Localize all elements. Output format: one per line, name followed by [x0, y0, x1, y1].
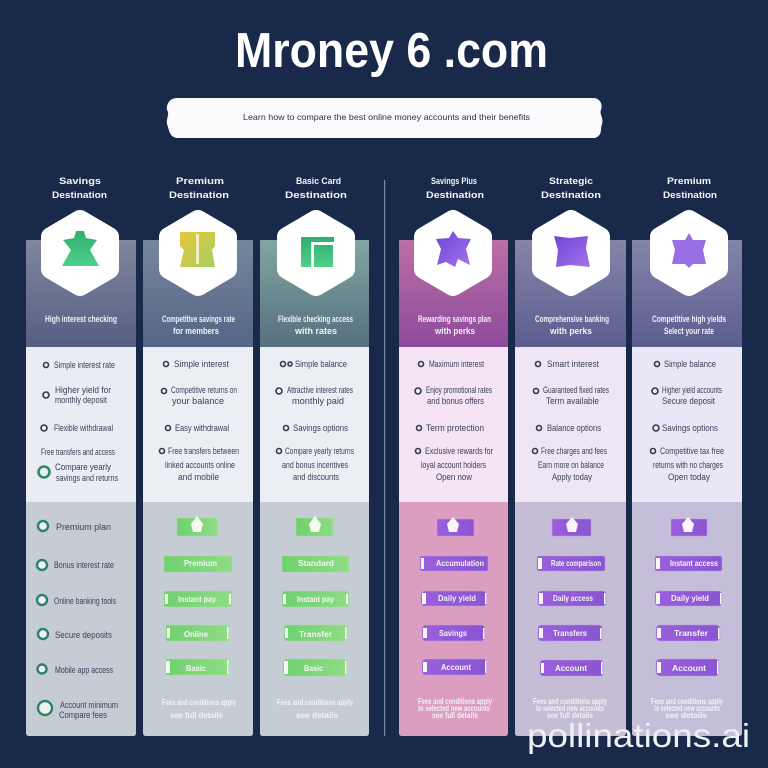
column 6 list: returns with no charges	[653, 460, 723, 470]
column 3 list: and bonus incentives	[282, 460, 348, 470]
column 4 list: Enjoy promotional rates	[426, 385, 492, 395]
column 3 list: monthly paid	[292, 396, 344, 406]
column 2 label: Premium	[176, 176, 224, 187]
column 2 buttons	[164, 516, 232, 675]
column 3 list: and discounts	[293, 472, 339, 482]
column 2 list: linked accounts online	[165, 460, 235, 470]
column 6 header text: Competitive high yields	[652, 314, 726, 325]
column 2 footer note	[162, 697, 236, 720]
column 5 buttons: Rate comparison	[551, 558, 601, 568]
column 3 footer note: Fees and conditions apply	[277, 697, 353, 707]
column 2 lower panel	[143, 502, 253, 736]
column 5 list panel	[515, 347, 626, 502]
column 5 list: Guaranteed fixed rates	[543, 385, 609, 395]
column 1 rows: Secure deposits	[55, 630, 112, 640]
column 5 list: Free charges and fees	[541, 446, 607, 456]
column 3 list: Attractive interest rates	[287, 385, 353, 395]
column 6 footer note: see details	[665, 710, 707, 720]
column 4 footer note: see full details	[432, 710, 478, 720]
column 2 header text: Competitive savings rate	[162, 314, 235, 325]
column 5 buttons: Account	[555, 663, 587, 673]
column 3 header text: Flexible checking access	[278, 314, 353, 325]
column 2 footer note: see full details	[170, 710, 223, 720]
column 4 footer note	[418, 696, 492, 720]
column 1 rows: Mobile app access	[55, 665, 113, 675]
column 3 header text line 2: with rates	[294, 326, 337, 337]
column 1 list: monthly deposit	[55, 395, 107, 405]
column 4 buttons	[420, 517, 488, 675]
center divider	[384, 180, 385, 736]
column 5	[515, 176, 626, 736]
column 6 buttons: Transfer	[674, 628, 709, 638]
column 3 lower panel	[260, 502, 369, 736]
column 2 list: Simple interest	[174, 359, 229, 369]
column 3 hexagon icon	[287, 220, 345, 286]
column 6 footer note: to selected new accounts	[654, 703, 720, 713]
column 3 list: Savings options	[293, 423, 348, 433]
column 3 label: Basic Card	[296, 176, 341, 187]
column 4 list	[415, 359, 493, 482]
column 1 rows: Compare fees	[59, 710, 107, 720]
column 2	[143, 176, 253, 736]
column 6 buttons: Instant access	[670, 558, 718, 568]
column 1 hexagon icon	[51, 220, 109, 286]
column 1 list: Simple interest rate	[54, 360, 115, 370]
column 6 label: Premium	[667, 176, 711, 187]
column 6 header text line 2: Select your rate	[664, 326, 714, 337]
subtitle pill: Learn how to compare the best online money accounts and their benefits	[243, 112, 530, 122]
column 1 list: savings and returns	[56, 473, 118, 483]
column 6 list	[650, 359, 724, 482]
column 3 label: Destination	[285, 190, 347, 201]
column 5 list: Term available	[546, 396, 599, 406]
column 2 header text line 2: for members	[173, 326, 219, 337]
column 5 lower panel	[515, 502, 626, 736]
column 2 list: and mobile	[178, 472, 219, 482]
column 4 header band	[399, 240, 508, 347]
column 6 footer note	[651, 696, 723, 720]
column 6	[632, 176, 742, 736]
column 3 buttons	[282, 516, 349, 676]
column 1 list: Compare yearly	[55, 462, 111, 472]
column 6 list panel	[632, 347, 742, 502]
column 3 header band	[260, 240, 369, 347]
column 4 header text line 2: with perks	[434, 326, 475, 337]
column 5 footer note: see full details	[547, 710, 593, 720]
column 6 footer note: Fees and conditions apply	[651, 696, 723, 706]
column 5 label: Strategic	[549, 176, 593, 187]
column 2 footer note: Fees and conditions apply	[162, 697, 236, 707]
column 1 list: Higher yield for	[55, 385, 111, 395]
column 5 buttons	[537, 517, 606, 676]
column 1 label: Destination	[52, 190, 107, 201]
column 5 list: Smart interest	[547, 359, 599, 369]
column 5 footer note: Fees and conditions apply	[533, 696, 607, 706]
column 3 buttons: Instant pay	[297, 594, 334, 604]
column 3 label	[285, 176, 347, 201]
column 1 rows: Premium plan	[56, 522, 111, 532]
column 3 footer note	[277, 697, 353, 720]
column 1 header text: High interest checking	[45, 314, 117, 325]
watermark: pollinations.ai	[527, 717, 750, 754]
column 4 header text: Rewarding savings plan	[418, 314, 491, 325]
column 6 list: Higher yield accounts	[662, 385, 722, 395]
column 5 list: Earn more on balance	[538, 460, 604, 470]
column 6 list: Open today	[668, 472, 710, 482]
column 6 label: Destination	[663, 190, 717, 201]
column 1 list panel	[26, 347, 136, 502]
column 4 buttons: Savings	[439, 628, 467, 638]
column 2 buttons: Online	[184, 629, 208, 639]
column 2 list: Easy withdrawal	[175, 423, 229, 433]
column 1 rows	[37, 521, 118, 720]
column 2 buttons: Instant pay	[178, 594, 216, 604]
column 3	[260, 176, 369, 736]
column 4 buttons: Account	[441, 662, 471, 672]
column 1 rows: Account minimum	[60, 700, 118, 710]
column 4	[399, 176, 508, 736]
column 2 header band	[143, 240, 253, 347]
column 3 list: Simple balance	[295, 359, 347, 369]
column 6 label	[663, 176, 717, 201]
column 2 list panel	[143, 347, 253, 502]
column 5 list: Apply today	[552, 472, 592, 482]
column 1 list	[38, 360, 118, 483]
column 2 list: your balance	[172, 396, 224, 406]
column 5 footer note: to selected new accounts	[536, 703, 604, 713]
column 1 rows: Bonus interest rate	[54, 560, 114, 570]
column 5 label: Destination	[541, 190, 601, 201]
column 6 hexagon icon	[660, 220, 718, 286]
column 6 list: Savings options	[662, 423, 718, 433]
title: Mroney 6 .com	[235, 24, 548, 78]
column 5 footer note	[533, 696, 607, 720]
column 1 label: Savings	[59, 176, 101, 187]
column 2 label	[169, 176, 229, 201]
column 4 label: Savings Plus	[431, 176, 477, 187]
column 4 list: Open now	[436, 472, 472, 482]
column 4 lower panel	[399, 502, 508, 736]
subtitle pill	[167, 98, 602, 138]
column 5 hexagon icon	[542, 220, 600, 286]
column 4 label: Destination	[426, 190, 484, 201]
column 4 list panel	[399, 347, 508, 502]
column 4 list: loyal account holders	[421, 460, 486, 470]
column 4 buttons: Accumulation	[436, 558, 484, 568]
column 4 buttons: Daily yield	[438, 593, 476, 603]
column 3 buttons: Transfer	[299, 629, 333, 639]
column 5 header band	[515, 240, 626, 347]
column 6 header band	[632, 240, 742, 347]
column 4 label	[426, 176, 484, 201]
column 2 list	[160, 359, 239, 482]
column 1 header band	[26, 240, 136, 347]
column 4 list: Exclusive rewards for	[425, 446, 493, 456]
column 6 buttons: Daily yield	[671, 593, 709, 603]
column 5 list	[532, 359, 609, 482]
column 2 buttons: Premium	[184, 558, 217, 568]
column 5 buttons: Transfers	[553, 628, 587, 638]
column 4 hexagon icon	[424, 220, 482, 286]
column 3 footer note: see details	[296, 710, 338, 720]
column 3 buttons: Basic	[304, 663, 323, 673]
column 6 list: Simple balance	[664, 359, 716, 369]
column 2 hexagon icon	[169, 220, 227, 286]
column 3 buttons: Standard	[298, 558, 334, 568]
column 1 lower panel	[26, 502, 136, 736]
column 6 lower panel	[632, 502, 742, 736]
column 1 label	[52, 176, 107, 201]
column 6 list: Secure deposit	[662, 396, 715, 406]
column 4 footer note: to selected new accounts	[418, 703, 490, 713]
column 4 list: Term protection	[426, 423, 484, 433]
column 2 list: Free transfers between	[168, 446, 239, 456]
column 4 list: Maximum interest	[429, 359, 484, 369]
column 3 list	[276, 359, 354, 482]
column 5 header text line 2: with perks	[549, 326, 592, 337]
column 6 list: Competitive tax free	[660, 446, 724, 456]
column 5 label	[541, 176, 601, 201]
column 5 buttons: Daily access	[553, 593, 593, 603]
column 3 list: Compare yearly returns	[285, 446, 354, 456]
column 4 list: and bonus offers	[427, 396, 484, 406]
column 1	[26, 176, 136, 736]
column 2 buttons: Basic	[186, 663, 206, 673]
column 3 list panel	[260, 347, 369, 502]
column 1 list: Flexible withdrawal	[54, 423, 113, 433]
column 2 list: Competitive returns on	[171, 385, 237, 395]
column 6 buttons: Account	[672, 663, 706, 673]
column 5 header text: Comprehensive banking	[535, 314, 609, 325]
column 2 label: Destination	[169, 190, 229, 201]
column 5 list: Balance options	[547, 423, 601, 433]
column 1 list: Free transfers and access	[41, 447, 115, 457]
column 6 buttons	[655, 517, 722, 676]
column 4 footer note: Fees and conditions apply	[418, 696, 492, 706]
column 1 rows: Online banking tools	[54, 596, 116, 606]
